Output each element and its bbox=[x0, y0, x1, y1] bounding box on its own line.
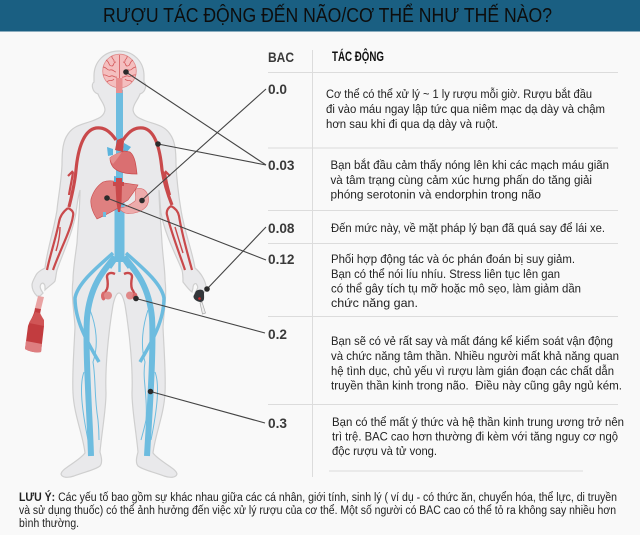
BAC level 0.2: 0.2 bbox=[268, 327, 287, 342]
liver bbox=[91, 181, 138, 219]
stomach bbox=[119, 188, 149, 214]
BAC level 0.3: trì trệ. BAC cao hơn thường đi kèm với tăng nguy cơ ngộ bbox=[332, 430, 618, 444]
table grid lines bbox=[268, 50, 618, 477]
BAC level 0.0: đi vào máu ngay lập tức qua niêm mạc dạ dày và chậm bbox=[326, 102, 605, 116]
portal vessel bbox=[103, 176, 124, 217]
BAC level 0.12: chức năng gan. bbox=[331, 296, 418, 310]
footnote bbox=[19, 491, 617, 530]
brain bbox=[103, 54, 136, 93]
BAC level 0.0: hơn sau khi đi qua dạ dày và ruột. bbox=[326, 117, 498, 131]
BAC level 0.0: Cơ thể có thể xử lý ~ 1 ly rượu mỗi giờ. Rượu bắt đầu bbox=[326, 86, 592, 101]
bottle bbox=[25, 296, 44, 352]
title banner bbox=[0, 0, 640, 32]
heart bbox=[107, 138, 137, 174]
BAC level 0.03: 0.03 bbox=[268, 158, 295, 173]
BAC level 0.0 bbox=[268, 82, 605, 131]
veins bbox=[75, 90, 164, 456]
BAC level 0.2 bbox=[268, 327, 622, 392]
BAC level 0.08: 0.08 bbox=[268, 221, 295, 236]
body silhouette bbox=[32, 51, 206, 477]
BAC level 0.12: Phối hợp động tác và óc phán đoán bị suy giảm. bbox=[331, 252, 575, 266]
BAC level 0.12 bbox=[268, 252, 581, 310]
BAC level 0.12: 0.12 bbox=[268, 252, 294, 267]
BAC level 0.12: Bạn có thể nói líu nhíu. Stress liên tục lên gan bbox=[331, 267, 560, 281]
callout dots bbox=[104, 69, 210, 394]
BAC level 0.2: Bạn sẽ có vẻ rất say và mất đáng kể kiểm soát vận động bbox=[331, 334, 613, 348]
BAC level 0.3: 0.3 bbox=[268, 416, 287, 431]
column heading: BAC: BAC bbox=[268, 50, 294, 65]
human body diagram bbox=[25, 51, 206, 477]
BAC level 0.2: truyền thần kinh trong não. Điều này cũng gây ngủ kém. bbox=[331, 378, 622, 392]
BAC level 0.3: Bạn có thể mất ý thức và hệ thần kinh trung ương trở nên bbox=[332, 415, 624, 429]
BAC level 0.03 bbox=[268, 157, 609, 202]
title banner: RƯỢU TÁC ĐỘNG ĐẾN NÃO/CƠ THỂ NHƯ THẾ NÀO? bbox=[103, 3, 552, 27]
BAC level 0.2: và chức năng tâm thần. Nhiều người mất khả năng quan bbox=[331, 349, 619, 363]
BAC level 0.12: có thể gây tích tụ mỡ hoặc mô sẹo, làm giảm dần bbox=[331, 282, 581, 296]
BAC level 0.2: hệ tình dục, chủ yếu vì rượu làm gián đoạn các chất dẫn bbox=[331, 363, 614, 378]
BAC level 0.3 bbox=[268, 415, 624, 458]
BAC level 0.08: Đến mức này, về mặt pháp lý bạn đã quá say để lái xe. bbox=[331, 221, 605, 235]
testes bbox=[101, 292, 138, 300]
footnote: bình thường. bbox=[19, 518, 79, 530]
BAC level 0.03: phóng serotonin và endorphin trong não bbox=[330, 188, 541, 202]
BAC level 0.3: độc rượu và tử vong. bbox=[332, 444, 437, 458]
callout lines bbox=[107, 72, 266, 423]
column heading: effects: TÁC ĐỘNG bbox=[332, 47, 384, 64]
arteries bbox=[47, 128, 192, 297]
BAC level 0.0: 0.0 bbox=[268, 82, 287, 97]
BAC level 0.03: và tâm trạng cùng cảm xúc hưng phấn do tăng giải bbox=[330, 173, 592, 187]
car key bbox=[193, 290, 206, 314]
BAC level 0.03: Bạn bắt đầu cảm thấy nóng lên khi các mạch máu giãn bbox=[330, 157, 609, 172]
